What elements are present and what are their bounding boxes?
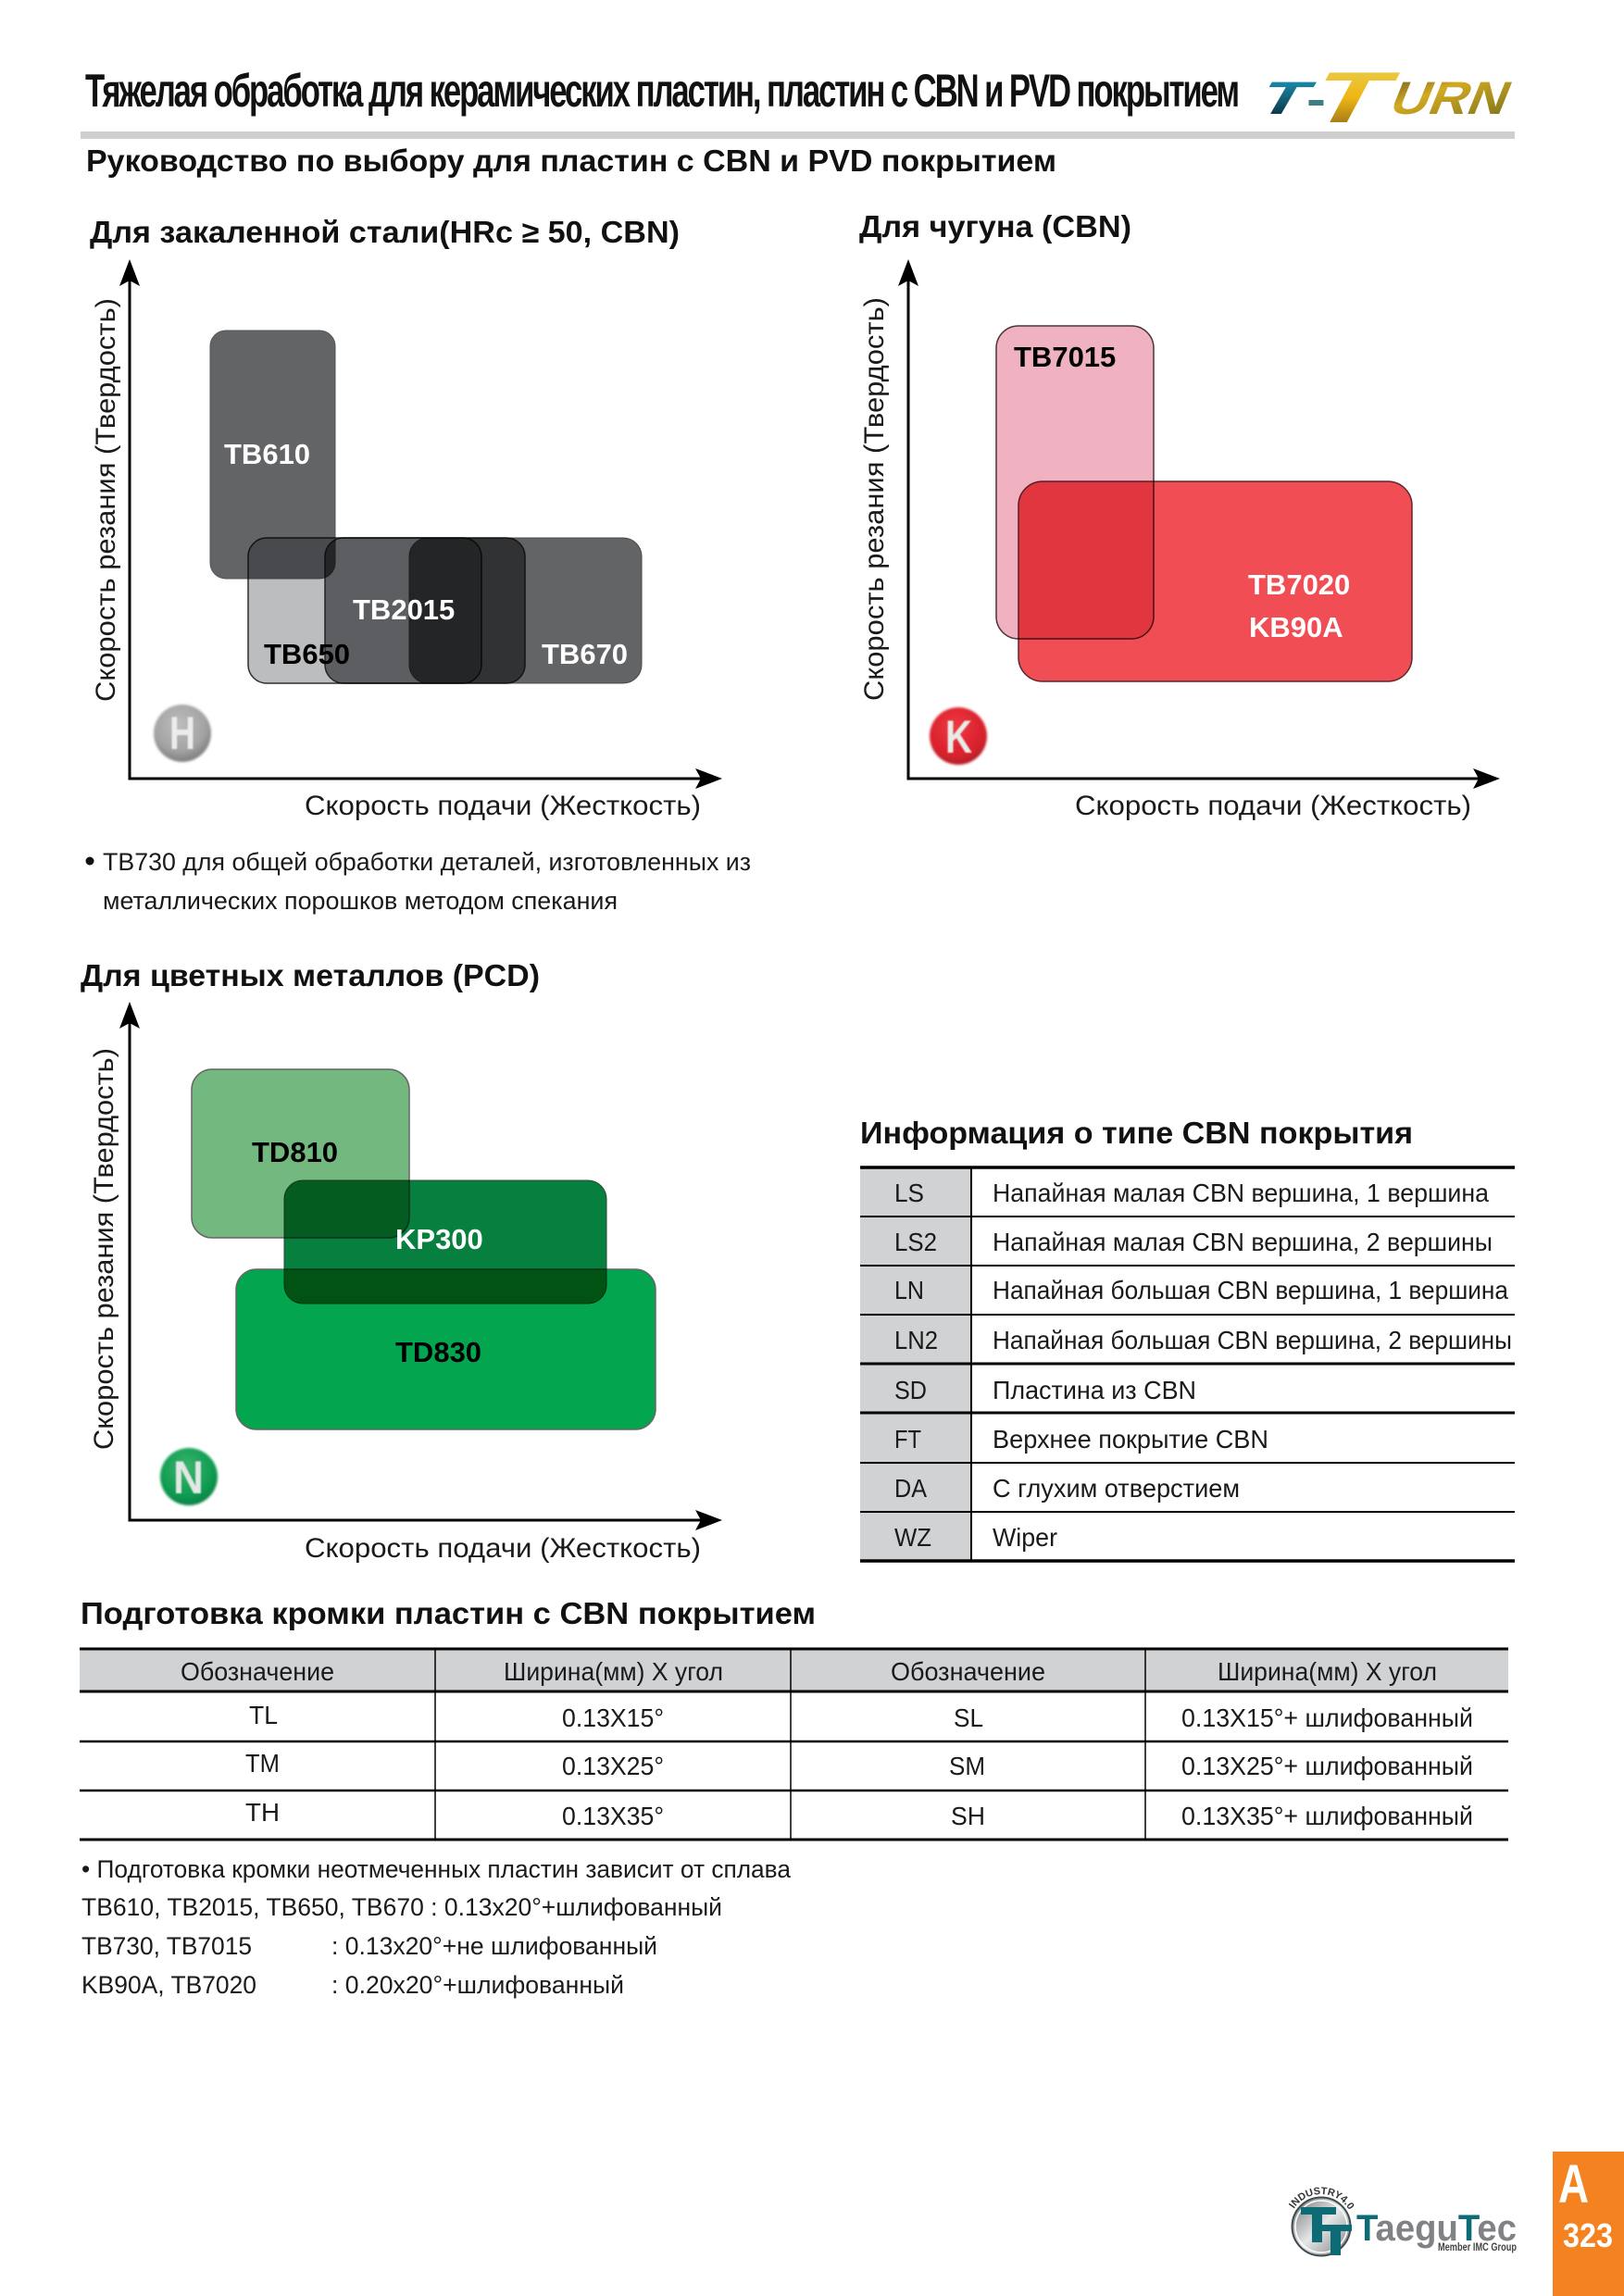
heading: cast iron: Для чугуна (CBN) [859,209,1131,243]
axes [119,1002,722,1530]
icon: N badge [160,1448,218,1505]
table: edge preparation: Ширина(мм) X угол [504,1657,723,1686]
axes [898,259,1500,789]
notes: edge preparation by alloy [81,1855,792,1999]
label: KP300: KP300 [395,1223,483,1255]
area: KP300 [284,1180,606,1304]
notes: edge preparation by alloy: : 0.13x20°+не шлифованный [331,1932,657,1960]
label: TB610: TB610 [224,438,310,470]
logo: T-Turn: URN [1382,73,1519,125]
logo: TaeguTec: TaeguTec [1356,2208,1517,2249]
panel: CBN edge preparation [80,1596,1508,1999]
table: CBN types: LS [894,1179,924,1207]
label: TB2015: TB2015 [353,593,455,626]
table: CBN types: FT [894,1425,921,1454]
table: CBN types: LN [894,1276,924,1304]
page tab: A [1558,2154,1589,2215]
logo: TaeguTec: INDUSTRY4.0 [1289,2187,1354,2209]
panel: CBN type information [860,1116,1515,1561]
notes: edge preparation by alloy: • Подготовка кромки неотмеченных пластин зависит от сплава [81,1855,792,1883]
area: TB670 [409,538,642,683]
label: TD830: TD830 [395,1336,481,1368]
notes: edge preparation by alloy: KB90A, TB7020 [81,1971,256,1999]
icon: K badge: K [945,711,972,763]
panel: hardened steel chart [90,215,722,821]
icon: N badge: N [173,1452,204,1504]
label: TD810: TD810 [252,1136,338,1168]
heading: non-ferrous: Для цветных металлов (PCD) [81,958,540,992]
label: TB650: TB650 [264,638,350,670]
table: edge preparation: 0.13X25°+ шлифованный [1181,1752,1473,1780]
notes: edge preparation by alloy: : 0.20x20°+шлифованный [331,1971,624,1999]
logo: T-Turn [1247,57,1519,138]
label: TB7020: TB7020 [1248,568,1350,601]
x axis label: Скорость подачи (Жесткость) [1075,791,1471,821]
y axis label: Скорость резания (Твердость) [91,298,121,702]
heading: CBN type: Информация о типе CBN покрытия [860,1116,1413,1150]
panel: cast iron chart [859,209,1500,821]
table: CBN types: Верхнее покрытие CBN [993,1425,1268,1454]
area: TB7015 [996,326,1154,639]
page tab [1553,2152,1624,2296]
notes: edge preparation by alloy: TB730, TB7015 [81,1932,252,1960]
label: TB7015: TB7015 [1014,341,1116,373]
y axis label: Скорость резания (Твердость) [89,1048,119,1450]
notes: edge preparation by alloy: TB610, TB2015, TB650, TB670 : 0.13x20°+шлифованный [81,1893,722,1921]
table: edge preparation: TM [245,1749,280,1778]
table: CBN types: LS2 [894,1228,937,1256]
area: TD830 [236,1269,656,1429]
table: CBN types: Wiper [993,1523,1057,1552]
table: edge preparation: TH [245,1798,280,1827]
icon: H badge [154,705,211,762]
table: edge preparation: SM [949,1752,985,1780]
table: CBN types: Напайная малая CBN вершина, 1 вершина [993,1179,1489,1207]
table: CBN types [860,1167,1515,1561]
panel: non-ferrous chart [81,958,722,1564]
heading: hardened steel: Для закаленной стали(HRc ≥ 50, CBN) [90,215,680,249]
logo: T-Turn: T [1247,73,1323,124]
area: TB650 [248,538,481,683]
table: CBN types: Напайная малая CBN вершина, 2 вершины [993,1228,1493,1256]
logo: TaeguTec [1289,2187,1517,2257]
table: edge preparation: Обозначение [891,1657,1045,1686]
icon: K badge [930,707,987,765]
label: KB90A: KB90A [1249,611,1343,643]
table: edge preparation: 0.13X15°+ шлифованный [1181,1703,1473,1732]
table: edge preparation: 0.13X35°+ шлифованный [1181,1802,1473,1830]
table: CBN types: Пластина из CBN [993,1376,1196,1404]
table: CBN types: Напайная большая CBN вершина, 1 вершина [993,1276,1508,1304]
x axis label: Скорость подачи (Жесткость) [305,1533,701,1564]
subtitle: Руководство по выбору для пластин с CBN и PVD покрытием [86,144,1056,178]
table: edge preparation: TL [249,1701,278,1729]
logo: T-Turn: - [1306,73,1326,125]
x axis label: Скорость подачи (Жесткость) [305,791,701,821]
area: TB610 [210,331,335,579]
note: TB730 [85,848,751,915]
table: CBN types: DA [894,1474,927,1503]
table: CBN types: Напайная большая CBN вершина, 2 вершины [993,1326,1512,1354]
table: edge preparation: 0.13X35° [562,1802,664,1830]
y axis label: Скорость резания (Твердость) [859,297,890,701]
axes [119,259,722,789]
table: edge preparation: Ширина(мм) X угол [1218,1657,1437,1686]
table: CBN types: WZ [894,1523,931,1552]
table: edge preparation: 0.13X15° [562,1703,664,1732]
table: CBN types: С глухим отверстием [993,1474,1240,1503]
icon: H badge: H [169,707,195,759]
table: edge preparation: SH [951,1802,985,1830]
area: TB2015 [325,538,525,683]
note: TB730: TB730 для общей обработки деталей, изготовленных из [103,848,751,876]
logo: T-Turn: T [1293,57,1409,138]
area: TD810 [192,1069,409,1238]
table: CBN types: SD [894,1376,927,1404]
table: edge preparation: SL [954,1703,983,1732]
table: edge preparation: 0.13X25° [562,1752,664,1780]
label: TB670: TB670 [542,638,628,670]
table: edge preparation: Обозначение [181,1657,334,1686]
page tab: 323 [1563,2216,1613,2254]
area: TB7020 / KB90A [1018,481,1412,681]
note: TB730: металлических порошков методом спекания [103,887,618,915]
table: CBN types: LN2 [894,1326,938,1354]
logo: TaeguTec: Member IMC Group [1438,2240,1517,2253]
heading: edge preparation: Подготовка кромки пластин с CBN покрытием [81,1596,816,1630]
table: edge preparation [80,1649,1508,1840]
